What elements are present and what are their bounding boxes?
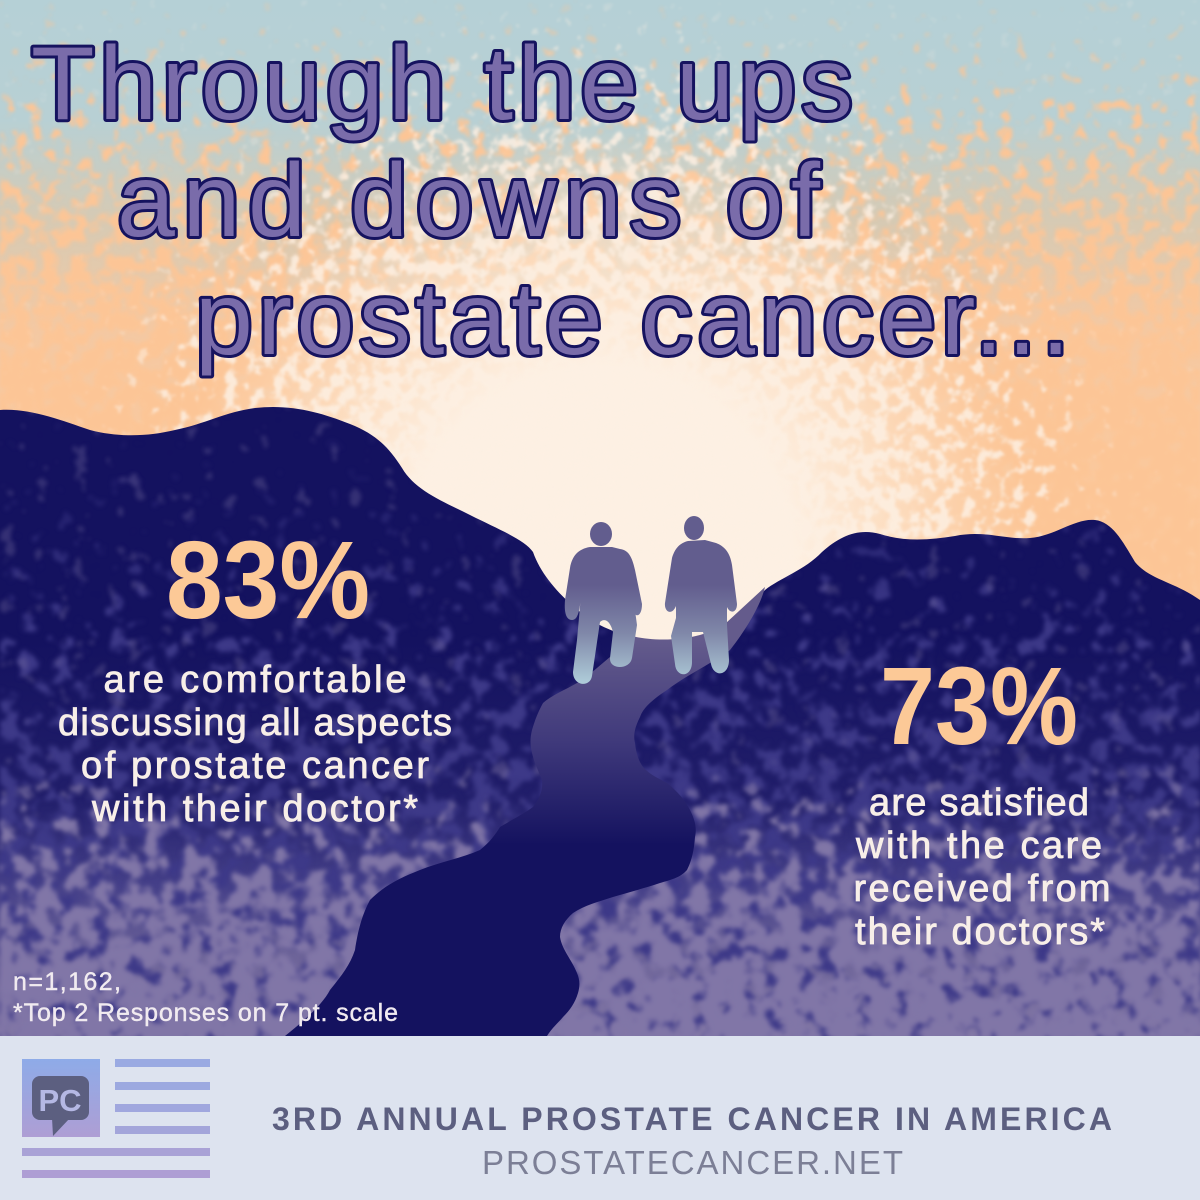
- footer title: 3RD ANNUAL PROSTATE CANCER IN AMERICA: [272, 1101, 1112, 1137]
- footnote: [13, 968, 398, 1027]
- stat: 73% satisfied: are satisfied: [869, 782, 1089, 824]
- footer website: PROSTATECANCER.NET: [482, 1144, 903, 1181]
- title: Through the ups: [31, 26, 853, 142]
- figure: right person standing: [665, 516, 737, 674]
- footnote: n=1,162,: [13, 968, 121, 996]
- title: and downs of: [117, 143, 821, 259]
- winding path: [285, 587, 765, 1036]
- stat: 83% comfortable: are comfortable: [104, 659, 406, 701]
- mountains: [0, 407, 1200, 1036]
- stat: 73% satisfied: with the care: [855, 825, 1102, 867]
- title: and downs of: [117, 143, 821, 259]
- stat: 73% satisfied: 73%: [880, 645, 1078, 768]
- footnote: *Top 2 Responses on 7 pt. scale: [13, 999, 398, 1027]
- stat: 83% comfortable: of prostate cancer: [81, 745, 429, 787]
- title: Through the ups: [31, 26, 853, 142]
- stat: 73% satisfied: received from: [854, 868, 1110, 910]
- title: [31, 26, 1070, 377]
- stat: 73% satisfied: their doctors*: [855, 911, 1105, 953]
- title: prostate cancer...: [195, 261, 1070, 377]
- stat: 83% comfortable: 83%: [166, 519, 370, 642]
- stat: 83% comfortable: with their doctor*: [91, 788, 418, 830]
- stat: 83% comfortable: discussing all aspects: [58, 702, 452, 744]
- title: prostate cancer...: [195, 261, 1070, 377]
- icon: PC logo: PC: [38, 1083, 82, 1118]
- stat: 73% satisfied: [854, 645, 1110, 953]
- figure: left person walking: [565, 522, 642, 684]
- footer band: [0, 1036, 1200, 1200]
- stat: 83% comfortable: [58, 519, 452, 830]
- icon: PC logo: [22, 1059, 210, 1178]
